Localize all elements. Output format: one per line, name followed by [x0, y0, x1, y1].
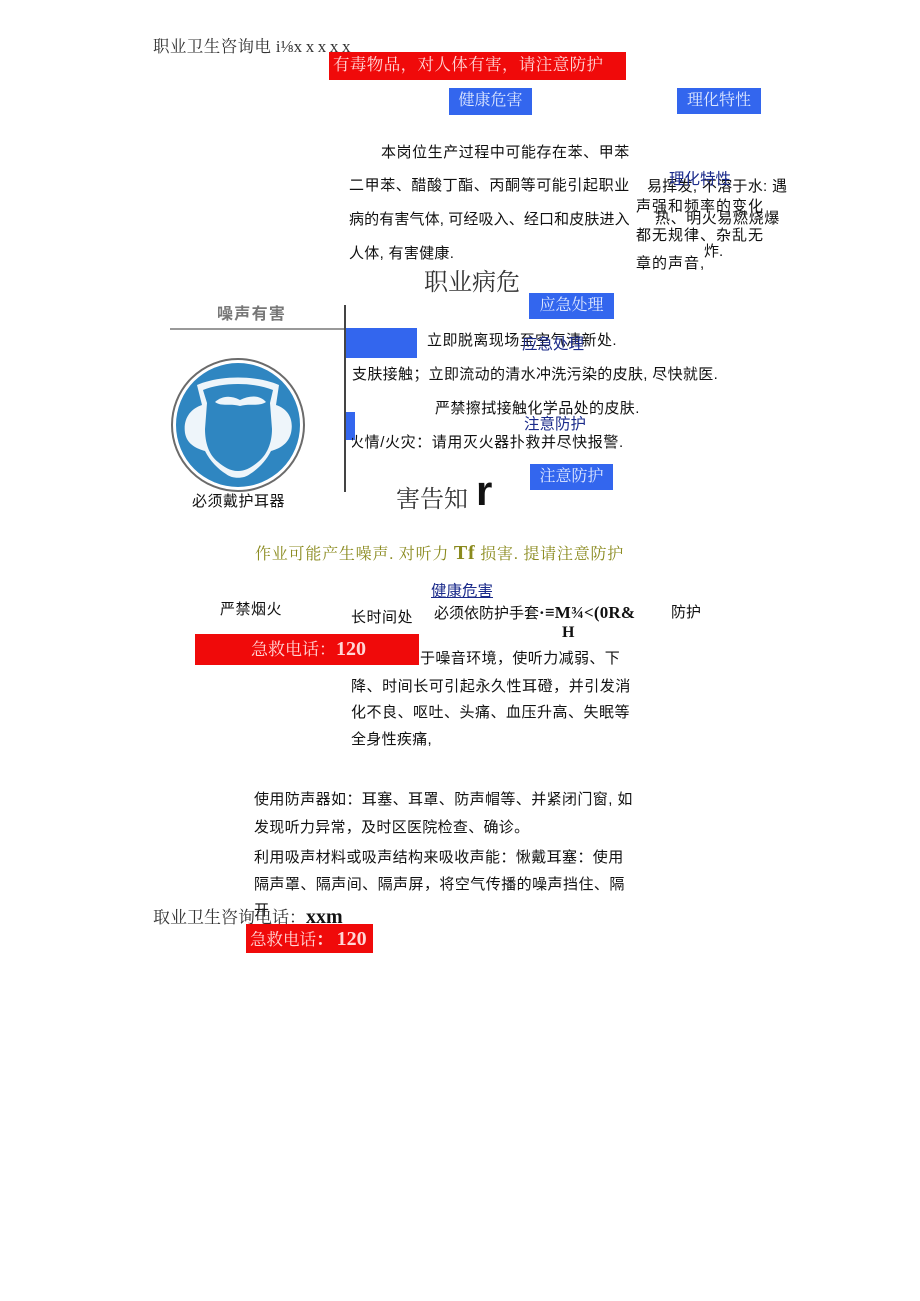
text block: protective measures — [254, 791, 633, 919]
text block: protective measures: 隔声罩、隔声间、隔声屏，将空气传播的噪声挡住、隔 — [254, 876, 625, 893]
button: physicochemical properties — [677, 88, 761, 114]
red warning banner — [329, 52, 626, 80]
text block: emergency response steps — [352, 332, 718, 451]
text block: noise health effects — [351, 650, 631, 748]
text block: noise health effects: 降、时间长可引起永久性耳磴，并引发消 — [351, 678, 631, 695]
button: emergency response — [529, 293, 614, 319]
button: physicochemical properties: 理化特性 — [687, 92, 751, 109]
large heading fragment with stray letter: 害告知 — [396, 487, 468, 513]
red emergency bar footer: 急救电话： 120 — [250, 928, 367, 950]
text block: physicochemical properties overlap: 炸. — [704, 243, 723, 260]
stray letter r: r — [476, 467, 492, 514]
text block: emergency response steps: 应急处理 — [522, 336, 584, 353]
text block: emergency response steps: 严禁擦拭接触化学品处的皮肤. — [435, 400, 640, 417]
red emergency bar — [195, 634, 419, 665]
text block: physicochemical properties overlap: 热、明火易燃烧爆 — [655, 210, 780, 227]
text: must wear gloves: 必须依防护手套·≡M¾<(0R& — [434, 603, 635, 622]
button: emergency response: 应急处理 — [539, 297, 604, 314]
footer: occupational health phone: 取业卫生咨询电话：xxm — [153, 906, 343, 928]
text block: health hazard description: 病的有害气体, 可经吸入、经口和皮肤进入 — [349, 211, 630, 228]
icon: ear protection sign — [171, 358, 305, 492]
text block: physicochemical properties overlap — [636, 170, 787, 272]
icon caption: 必须戴护耳器 — [192, 493, 285, 510]
red emergency bar: 急救电话：120 — [251, 638, 366, 660]
button: precautions: 注意防护 — [539, 468, 604, 485]
noise hazard label: 噪声有害 — [217, 306, 286, 323]
text block: health hazard description: 人体, 有害健康. — [349, 245, 454, 262]
large heading fragment: 职业病危 — [424, 270, 520, 296]
text block: emergency response steps: 立即脱离现场至空气清新处. — [427, 332, 617, 349]
link: health hazards: 健康危害 — [431, 583, 493, 600]
red emergency bar footer — [246, 924, 373, 953]
header: occupational health phone: 职业卫生咨询电 i⅛xxxxx — [153, 37, 354, 56]
blue block upper — [346, 328, 417, 358]
text block: protective measures: 发现听力异常，及时区医院检查、确诊。 — [254, 819, 529, 836]
text block: health hazard description — [349, 144, 630, 262]
text block: physicochemical properties overlap: 易挥发, 不溶于水: 遇 — [647, 178, 787, 195]
olive warning line: 作业可能产生噪声. 对听力 Tf 损害. 提请注意防护 — [255, 542, 624, 564]
stray letter H: H — [562, 624, 574, 641]
text block: noise health effects: 于噪音环境，使听力减弱、下 — [420, 650, 620, 667]
text block: physicochemical properties overlap: 声强和频率的变化 — [636, 198, 764, 215]
text block: protective measures: 利用吸声材料或吸声结构来吸收声能：愀戴耳塞：使用 — [254, 849, 624, 866]
text block: emergency response steps: 注意防护 — [524, 416, 586, 433]
text block: protective measures: 使用防声器如：耳塞、耳罩、防声帽等、并紧闭门窗, 如 — [254, 791, 633, 808]
text block: emergency response steps: 支肤接触；立即流动的清水冲洗污染的皮肤, 尽快就医. — [352, 366, 718, 383]
button: precautions — [530, 464, 613, 490]
blue block lower — [346, 412, 355, 440]
text block: physicochemical properties overlap: 理化特性 — [669, 171, 731, 188]
text block: noise health effects: 全身性疾痛, — [351, 731, 432, 748]
text block: protective measures: 开 — [254, 902, 269, 919]
text block: health hazard description: 本岗位生产过程中可能存在苯、甲苯 — [381, 144, 630, 161]
label: no smoking: 严禁烟火 — [220, 601, 282, 618]
button: health hazards: 健康危害 — [458, 92, 522, 109]
label: protection: 防护 — [671, 604, 701, 621]
button: health hazards — [449, 88, 532, 115]
text fragment: long exposure: 长时间处 — [351, 609, 413, 626]
text block: emergency response steps: 火情/火灾：请用灭火器扑救并尽快报警. — [352, 434, 624, 451]
red warning banner: 有毒物品，对人体有害，请注意防护 — [333, 55, 603, 74]
text block: noise health effects: 化不良、呕吐、头痛、血压升高、失眠等 — [351, 704, 630, 721]
text block: physicochemical properties overlap: 章的声音, — [636, 255, 705, 272]
text block: physicochemical properties overlap: 都无规律、杂乱无 — [636, 227, 764, 244]
text block: health hazard description: 二甲苯、醋酸丁酯、丙酮等可能引起职业 — [349, 177, 630, 194]
